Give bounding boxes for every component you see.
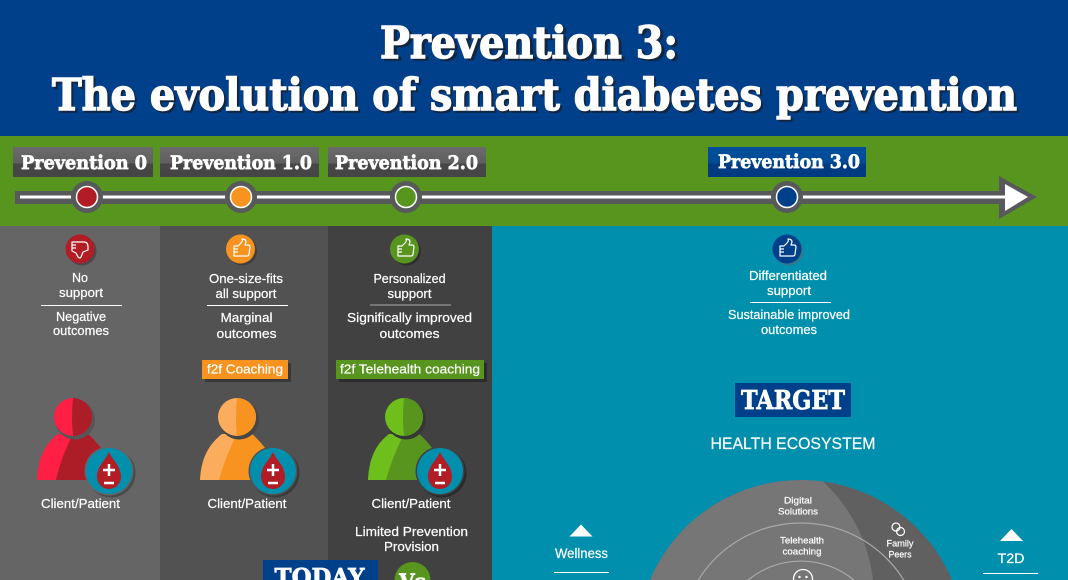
text: Prevention 2.0 support and outcomes: Significally improved	[347, 310, 472, 325]
text: Prevention 2.0 support and outcomes: support	[388, 287, 432, 301]
scale marker: wellness	[554, 524, 609, 573]
timeline node: red	[71, 181, 103, 213]
text: Prevention 0 support and outcomes: No	[72, 271, 88, 285]
timeline label: Prevention 0	[13, 147, 153, 177]
label: telehealth coaching: coaching	[782, 546, 822, 558]
timeline band	[0, 136, 1068, 226]
panel: Prevention 2.0	[328, 226, 492, 580]
icon: thumbs up orange	[226, 234, 257, 266]
timeline label: Prevention 2.0: Prevention 2.0	[335, 152, 478, 174]
text: Prevention 1.0 support and outcomes: Marginal	[220, 310, 273, 325]
timeline arrow	[15, 176, 1037, 219]
timeline label: Prevention 1.0: Prevention 1.0	[170, 152, 312, 174]
timeline label: Prevention 1.0	[160, 147, 319, 177]
text: Prevention 0 support and outcomes: Negative	[56, 310, 106, 324]
label: telehealth coaching	[780, 536, 824, 558]
timeline label: Prevention 3.0	[708, 147, 866, 177]
text: Prevention 2.0 support and outcomes	[347, 272, 472, 341]
icon: client orange	[200, 398, 300, 498]
label: family peers	[886, 538, 914, 560]
icon: family peers chat	[892, 523, 904, 536]
title: Prevention 3:	[383, 20, 681, 71]
label: client patient green: Client/Patient	[372, 496, 451, 511]
header band	[0, 0, 1068, 136]
heading: health ecosystem: HEALTH ECOSYSTEM	[710, 434, 876, 453]
badge: TODAY	[263, 560, 378, 580]
text: Prevention 3.0 support and outcomes: support	[767, 284, 812, 298]
scale marker: T2D: T2D	[998, 550, 1024, 566]
timeline node: green	[390, 181, 422, 213]
scale marker: T2D	[983, 529, 1038, 574]
tag: f2f Coaching: f2f Coaching	[207, 362, 283, 376]
label: client patient orange: Client/Patient	[208, 496, 287, 511]
icon: face	[794, 570, 813, 580]
title: Prevention 3:	[380, 18, 678, 69]
timeline label: Prevention 3.0: Prevention 3.0	[718, 151, 860, 173]
label: family peers: Family	[886, 538, 914, 550]
icon: client green	[368, 398, 466, 498]
text: limited prevention provision	[355, 524, 468, 554]
icon: thumbs up green	[390, 234, 421, 266]
text: Prevention 1.0 support and outcomes	[207, 272, 288, 341]
text: limited prevention provision: Limited Prevention	[355, 524, 468, 539]
text: Prevention 0 support and outcomes	[41, 271, 122, 338]
icon: thumbs up blue	[772, 234, 804, 266]
tag: f2f Coaching	[202, 360, 291, 382]
label: client patient red: Client/Patient	[41, 496, 120, 511]
icon: client red	[37, 398, 136, 498]
timeline label: Prevention 0: Prevention 0	[21, 152, 147, 174]
scale marker: wellness: Wellness	[555, 546, 608, 561]
text: Prevention 3.0 support and outcomes: Differentiated	[749, 269, 827, 283]
timeline label: Prevention 2.0	[328, 147, 486, 177]
title	[52, 18, 1019, 123]
panel: Prevention 3.0	[492, 226, 1068, 580]
label: family peers: Peers	[888, 550, 912, 560]
text: Prevention 0 support and outcomes: support	[59, 286, 104, 300]
label: digital solutions: Solutions	[778, 506, 818, 518]
timeline node: blue	[771, 181, 803, 213]
label: digital solutions	[778, 496, 818, 518]
chart: ecosystem circles	[650, 480, 952, 580]
text: Prevention 0 support and outcomes: outcomes	[53, 324, 109, 338]
text: Prevention 1.0 support and outcomes: outcomes	[216, 326, 277, 341]
text: Prevention 1.0 support and outcomes: all support	[216, 287, 277, 301]
text: Prevention 2.0 support and outcomes: Personalized	[374, 272, 446, 286]
label: digital solutions: Digital	[784, 496, 812, 506]
text: Prevention 3.0 support and outcomes: Sustainable improved	[728, 308, 850, 322]
label: telehealth coaching: Telehealth	[780, 536, 824, 546]
tag: f2f Telehealth coaching: f2f Telehealth coaching	[340, 362, 480, 376]
timeline node: orange	[225, 181, 257, 213]
text: Prevention 3.0 support and outcomes: outcomes	[761, 323, 817, 337]
badge: TARGET: TARGET	[741, 386, 846, 416]
badge: Vs	[394, 562, 430, 580]
text: limited prevention provision: Provision	[384, 539, 439, 554]
panel: Prevention 1.0	[160, 226, 328, 580]
text: Prevention 3.0 support and outcomes	[728, 269, 850, 337]
icon: thumbs down	[66, 234, 96, 266]
panel: Prevention 0	[0, 226, 160, 580]
text: Prevention 2.0 support and outcomes: outcomes	[380, 326, 440, 341]
tag: f2f Telehealth coaching	[336, 360, 487, 382]
text: Prevention 1.0 support and outcomes: One-size-fits	[209, 272, 283, 286]
